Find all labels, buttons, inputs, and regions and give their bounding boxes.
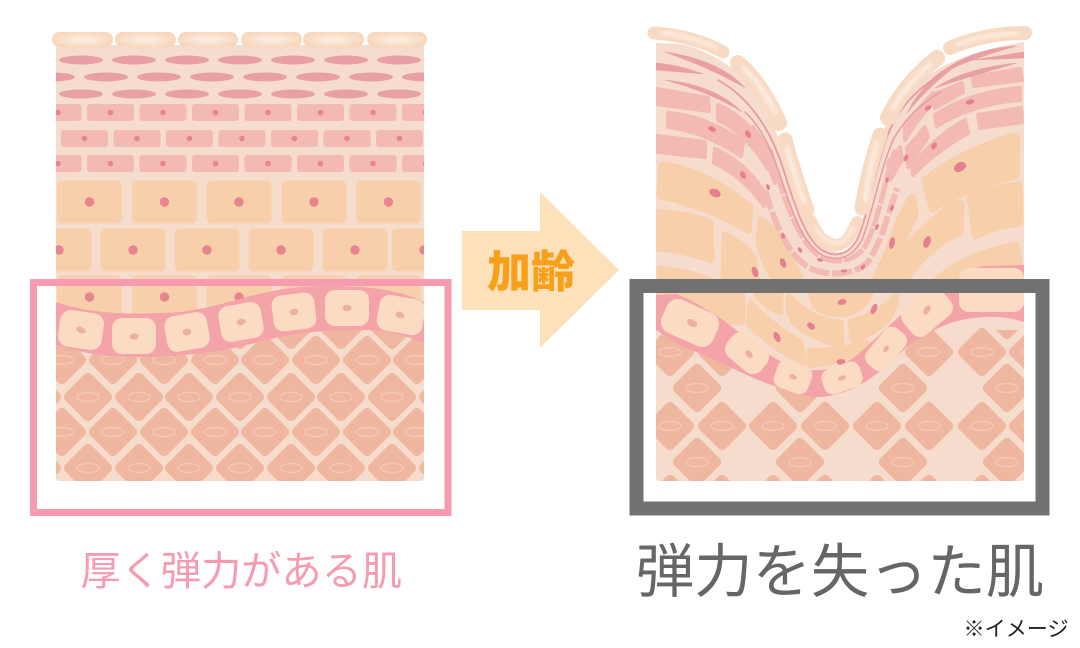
caption: thick elastic skin: 厚く弾力がある肌: [80, 549, 402, 594]
pink bricks, right: [657, 69, 1022, 206]
caption: skin with lost elasticity: 弾力を失った肌: [636, 540, 1044, 605]
pink brick rows, left: [56, 104, 424, 172]
diamond dermis cells, left: [56, 330, 424, 481]
surface cells, left: [52, 32, 427, 47]
orange cells, right: [659, 136, 1020, 365]
compressed valley bands: [765, 150, 897, 273]
orange cell rows, left: [56, 180, 424, 314]
arrow shape: [462, 192, 619, 348]
basal membrane with cells, right: [656, 265, 1024, 397]
surface cells, right: [654, 33, 1025, 245]
basal membrane with cells, left: [56, 286, 427, 357]
flattened cell rows, left: [56, 56, 424, 98]
arrow label: 加齢: [487, 248, 575, 297]
note: image only: ※イメージ: [964, 618, 1069, 641]
panel: skin with lost elasticity: [648, 26, 1032, 481]
nuclei, right: [707, 98, 975, 365]
arrow with 加齢 label: [462, 192, 619, 348]
gray highlight frame: [636, 286, 1042, 508]
panel: thick elastic skin: [52, 32, 427, 481]
diamond dermis cells, right: [656, 328, 1024, 481]
dark flattened streaks: [656, 46, 1024, 258]
pink highlight frame: [34, 282, 448, 512]
skin layers, left: [56, 45, 424, 481]
skin layers, right: [656, 42, 1024, 481]
